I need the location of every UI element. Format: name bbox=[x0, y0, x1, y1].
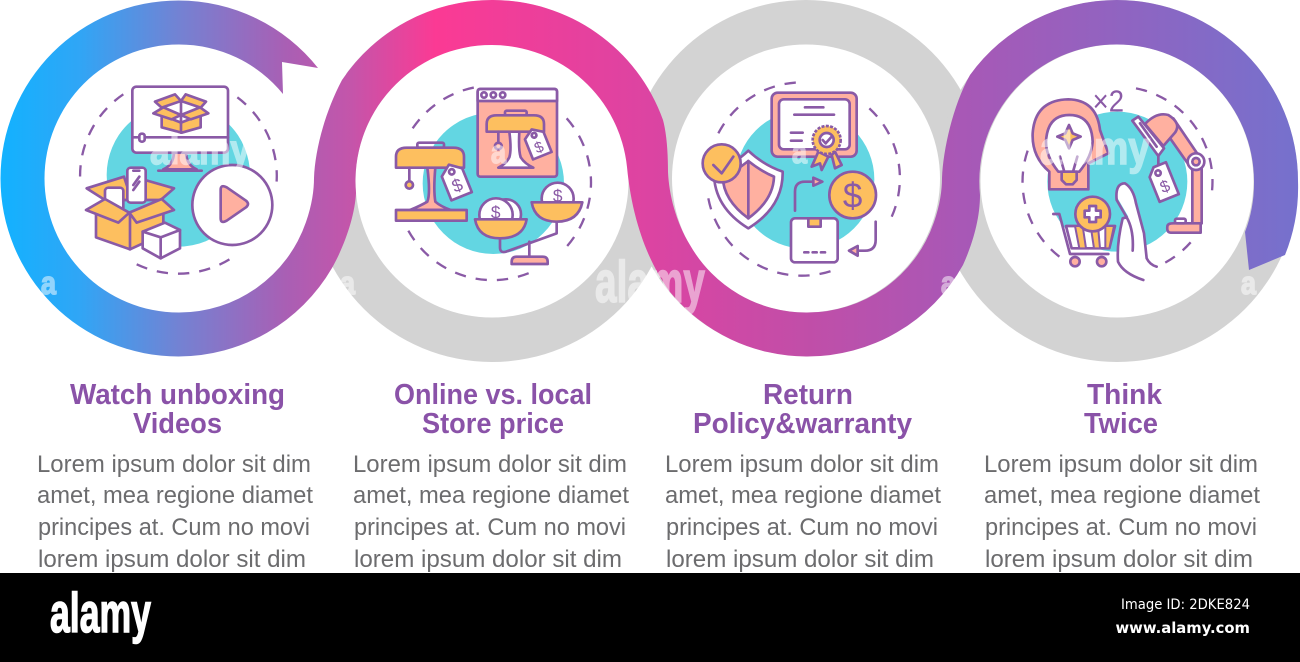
icon: unboxing video bbox=[80, 87, 277, 274]
heading: return policy and warranty bbox=[693, 379, 912, 440]
body text: step 4: amet, mea regione diamet bbox=[984, 482, 1260, 509]
icon: online vs local store price: $ bbox=[532, 138, 547, 157]
white disc: step 2 bbox=[356, 44, 628, 318]
watermark text: a bbox=[792, 134, 807, 170]
body text: step 3 bbox=[665, 451, 941, 573]
heading: think twice: Think bbox=[1087, 379, 1163, 411]
footer logo: alamy bbox=[50, 581, 151, 644]
body text: step 4: lorem ipsum dolor sit dim bbox=[985, 546, 1253, 573]
heading: watch unboxing videos: Videos bbox=[133, 408, 222, 440]
icon: think twice bbox=[1023, 85, 1212, 280]
heading: watch unboxing videos: Watch unboxing bbox=[70, 379, 285, 411]
watermark text: alamy bbox=[1040, 122, 1150, 174]
body text: step 4: principes at. Cum no movi bbox=[985, 514, 1257, 541]
heading: online vs local store price bbox=[394, 379, 592, 440]
heading: think twice: Twice bbox=[1084, 408, 1158, 440]
body text: step 1: amet, mea regione diamet bbox=[37, 482, 313, 509]
white disc: step 3 bbox=[672, 44, 940, 312]
body text: step 4 bbox=[984, 451, 1260, 573]
heading: online vs local store price: Online vs. local bbox=[394, 379, 592, 411]
white gap left of ribbon rise bbox=[300, 50, 350, 240]
watermark text: alamy bbox=[150, 126, 251, 173]
white disc: step 1 bbox=[44, 44, 312, 312]
watermark text: a bbox=[941, 265, 956, 301]
icon: return policy and warranty: $ bbox=[843, 176, 862, 215]
watermark text: a bbox=[1241, 265, 1256, 301]
icon: think twice: ×2 bbox=[1093, 85, 1124, 119]
body text: step 1: Lorem ipsum dolor sit dim bbox=[37, 451, 311, 478]
body text: step 2: principes at. Cum no movi bbox=[354, 514, 626, 541]
heading: return policy and warranty: Policy&warranty bbox=[693, 408, 912, 440]
watermark text: alamy bbox=[595, 250, 705, 315]
white disc: step 4 bbox=[980, 44, 1254, 318]
grey ring: step 4 bbox=[936, 0, 1298, 362]
body text: step 3: principes at. Cum no movi bbox=[666, 514, 938, 541]
website: www.alamy.com bbox=[1116, 619, 1250, 637]
body text: step 1: lorem ipsum dolor sit dim bbox=[38, 546, 306, 573]
watermark text: a bbox=[491, 134, 506, 170]
icon: think twice: $ bbox=[1157, 176, 1173, 197]
gradient ribbon winding through circles bbox=[0, 0, 1298, 357]
body text: step 3: lorem ipsum dolor sit dim bbox=[666, 546, 934, 573]
watermark text: a bbox=[340, 265, 355, 301]
icon: online vs local store price: $ bbox=[553, 186, 563, 206]
grey ring: step 3 bbox=[628, 0, 984, 356]
body text: step 2: Lorem ipsum dolor sit dim bbox=[353, 451, 627, 478]
icon: return policy and warranty bbox=[703, 82, 900, 276]
footer bar bbox=[0, 573, 1300, 662]
body text: step 2: lorem ipsum dolor sit dim bbox=[354, 546, 622, 573]
body text: step 1 bbox=[37, 451, 313, 573]
image id: Image ID: 2DKE824 bbox=[1121, 597, 1250, 613]
body text: step 1: principes at. Cum no movi bbox=[38, 514, 310, 541]
icon: online vs local store price: $ bbox=[449, 174, 466, 197]
watermark text bbox=[41, 122, 1256, 315]
heading: return policy and warranty: Return bbox=[763, 379, 853, 411]
icon: online vs local store price: $ bbox=[491, 202, 501, 222]
heading: online vs local store price: Store price bbox=[422, 408, 564, 440]
heading: watch unboxing videos bbox=[70, 379, 285, 440]
watermark text: a bbox=[41, 265, 56, 301]
body text: step 2 bbox=[353, 451, 629, 573]
body text: step 2: amet, mea regione diamet bbox=[353, 482, 629, 509]
body text: step 3: Lorem ipsum dolor sit dim bbox=[665, 451, 939, 478]
icon: online vs local store price bbox=[396, 87, 591, 280]
body text: step 4: Lorem ipsum dolor sit dim bbox=[984, 451, 1258, 478]
grey ring: step 2 bbox=[311, 0, 673, 362]
body text: step 3: amet, mea regione diamet bbox=[665, 482, 941, 509]
heading: think twice bbox=[1084, 379, 1163, 440]
